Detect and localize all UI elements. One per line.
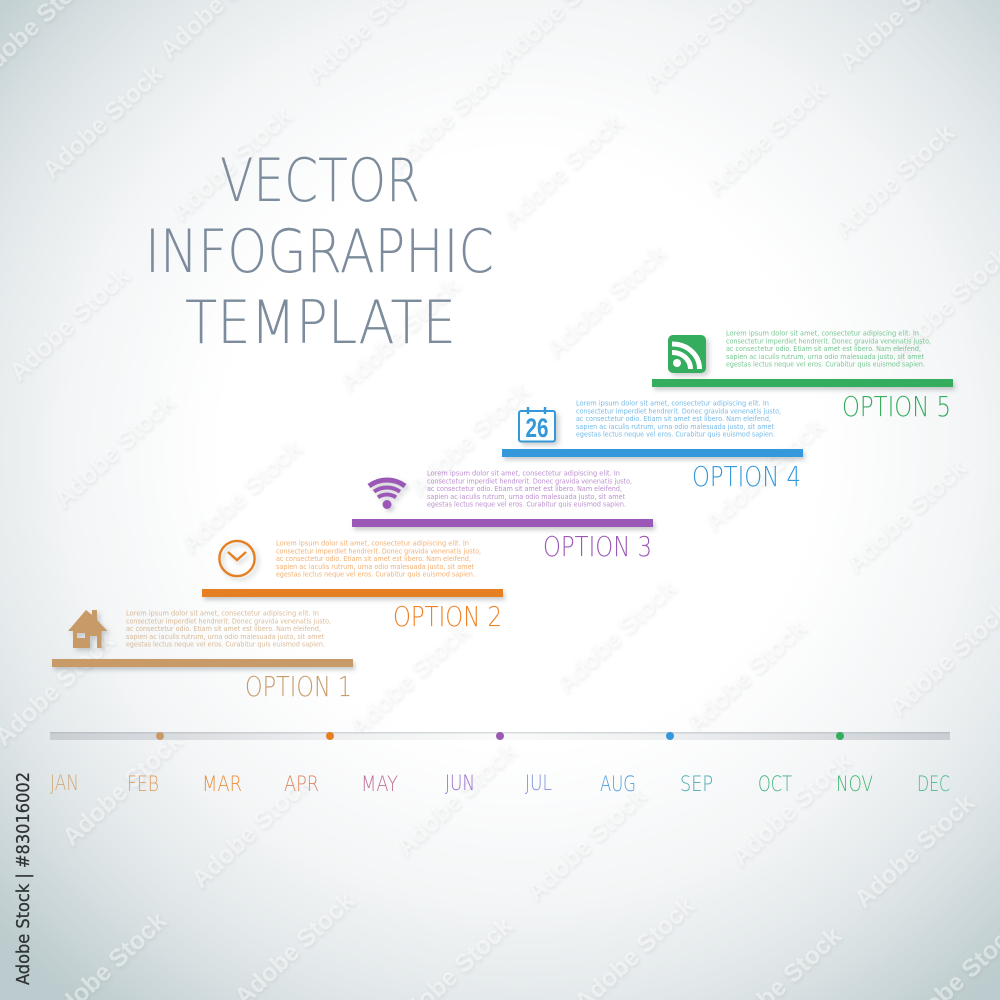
label: option 5: OPTION 5 [842, 391, 951, 423]
marker: nov [836, 732, 844, 740]
text block: option 1: consectetur imperdiet hendrerit. Donec gravida venenatis justo, [126, 617, 331, 625]
label: option 3: OPTION 3 [543, 531, 652, 563]
panel: option 3 [352, 470, 653, 563]
panel: option 5 [652, 330, 953, 423]
text block: option 2: ac consectetur odio. Etiam sit amet est libero. Nam eleifend, [276, 555, 471, 563]
month labels: APR [284, 772, 319, 796]
stock id label: Adobe Stock | #83016002 [13, 772, 34, 985]
icon: calendar [519, 407, 555, 443]
timeline [50, 732, 950, 740]
watermark pattern: Adobe Stock [681, 614, 812, 738]
icon: calendar: 26 [526, 413, 548, 443]
text block: option 4: sapien ac iaculis rutrum, urna odio malesuada justo, sit amet [576, 423, 774, 431]
panel: option 4 [502, 400, 803, 493]
watermark pattern: Adobe Stock [551, 574, 682, 698]
text block: option 4: Lorem ipsum dolor sit amet, consectetur adipiscing elit. In [576, 400, 769, 408]
text block: option 1: ac consectetur odio. Etiam sit amet est libero. Nam eleifend, [126, 625, 321, 633]
watermark pattern: Adobe Stock [541, 239, 672, 363]
watermark pattern: Adobe Stock [344, 617, 475, 741]
title [145, 146, 494, 358]
month labels: DEC [917, 772, 950, 796]
watermark pattern: Adobe Stock [186, 769, 317, 893]
month labels: JUL [525, 771, 552, 795]
text block: option 4: ac consectetur odio. Etiam sit amet est libero. Nam eleifend, [576, 415, 771, 423]
text block: option 1 [126, 610, 331, 649]
text block: option 1: egestas lectus neque vel eros. Curabitur quis euismod sapien. [126, 641, 325, 649]
watermark pattern: Adobe Stock [849, 789, 980, 913]
bar: option 4 [502, 449, 803, 457]
icon: rss [668, 335, 706, 373]
text block: option 2 [276, 540, 481, 579]
month labels: MAY [361, 772, 398, 796]
panel: option 1 [52, 610, 353, 703]
month labels: AUG [600, 772, 636, 796]
text block: option 1: Lorem ipsum dolor sit amet, consectetur adipiscing elit. In [126, 610, 319, 618]
icon: house [68, 610, 108, 648]
text block: option 5: ac consectetur odio. Etiam sit amet est libero. Nam eleifend, [726, 345, 921, 353]
watermark pattern: Adobe Stock [726, 747, 857, 871]
text block: option 3: ac consectetur odio. Etiam sit amet est libero. Nam eleifend, [427, 485, 622, 493]
bar: option 5 [652, 379, 953, 387]
text block: option 4: egestas lectus neque vel eros. Curabitur quis euismod sapien. [576, 431, 775, 439]
watermark pattern: Adobe Stock [699, 412, 830, 536]
month labels [50, 771, 950, 796]
text block: option 3 [427, 470, 632, 509]
watermark pattern: Adobe Stock [37, 60, 168, 184]
month labels: OCT [758, 772, 792, 796]
watermark pattern: Adobe Stock [841, 454, 972, 578]
label: option 4: OPTION 4 [692, 461, 801, 493]
watermark pattern: Adobe Stock [4, 262, 135, 386]
month labels: JUN [445, 771, 475, 795]
text block: option 3: consectetur imperdiet hendrerit. Donec gravida venenatis justo, [427, 477, 632, 485]
watermark pattern: Adobe Stock [57, 727, 188, 851]
marker: feb [156, 732, 164, 740]
text block: option 5: sapien ac iaculis rutrum, urna odio malesuada justo, sit amet [726, 353, 924, 361]
text block: option 5: consectetur imperdiet hendrerit. Donec gravida venenatis justo, [726, 337, 931, 345]
title: INFOGRAPHIC [145, 217, 494, 287]
watermark pattern: Adobe Stock [334, 272, 465, 396]
label: option 1: OPTION 1 [245, 671, 352, 703]
text block: option 5: egestas lectus neque vel eros. Curabitur quis euismod sapien. [726, 361, 925, 369]
marker: apr [326, 732, 334, 740]
bar: option 3 [352, 519, 653, 527]
label: option 2: OPTION 2 [393, 601, 502, 633]
text block: option 4 [576, 400, 781, 439]
text block: option 1: sapien ac iaculis rutrum, urna odio malesuada justo, sit amet [126, 633, 324, 641]
marker: jun [496, 732, 504, 740]
bar: option 1 [52, 659, 353, 667]
watermark pattern: Adobe Stock [521, 782, 652, 906]
title: VECTOR [220, 146, 420, 216]
watermark pattern: Adobe Stock [829, 119, 960, 243]
text block: option 3: sapien ac iaculis rutrum, urna odio malesuada justo, sit amet [427, 493, 625, 501]
watermark pattern: Adobe Stock [384, 55, 515, 179]
watermark pattern: Adobe Stock [391, 737, 522, 861]
month labels: NOV [836, 772, 873, 796]
month labels: JAN [50, 771, 79, 795]
text block: option 2: Lorem ipsum dolor sit amet, consectetur adipiscing elit. In [276, 540, 469, 548]
text block: option 5 [726, 330, 931, 369]
month labels: SEP [680, 772, 713, 796]
month labels: FEB [127, 772, 159, 796]
text block: option 3: Lorem ipsum dolor sit amet, consectetur adipiscing elit. In [427, 470, 620, 478]
icon: clock [219, 541, 255, 576]
text block: option 3: egestas lectus neque vel eros. Curabitur quis euismod sapien. [427, 501, 626, 509]
watermark pattern: Adobe Stock [404, 377, 535, 501]
watermark pattern: Adobe Stock [176, 434, 307, 558]
marker: sep [666, 732, 674, 740]
watermark pattern: Adobe Stock [166, 102, 297, 226]
watermark pattern: Adobe Stock [49, 389, 180, 513]
panel: option 2 [202, 540, 503, 633]
text block: option 2: consectetur imperdiet hendrerit. Donec gravida venenatis justo, [276, 547, 481, 555]
text block: option 4: consectetur imperdiet hendrerit. Donec gravida venenatis justo, [576, 407, 781, 415]
title: TEMPLATE [185, 288, 456, 358]
icon: wifi [369, 480, 405, 509]
bar: option 2 [202, 589, 503, 597]
month labels: MAR [202, 772, 242, 796]
watermark pattern: Adobe Stock [701, 77, 832, 201]
text block: option 2: sapien ac iaculis rutrum, urna odio malesuada justo, sit amet [276, 563, 474, 571]
text block: option 2: egestas lectus neque vel eros. Curabitur quis euismod sapien. [276, 571, 475, 579]
watermark pattern: Adobe Stock [497, 109, 628, 233]
text block: option 5: Lorem ipsum dolor sit amet, consectetur adipiscing elit. In [726, 330, 919, 338]
